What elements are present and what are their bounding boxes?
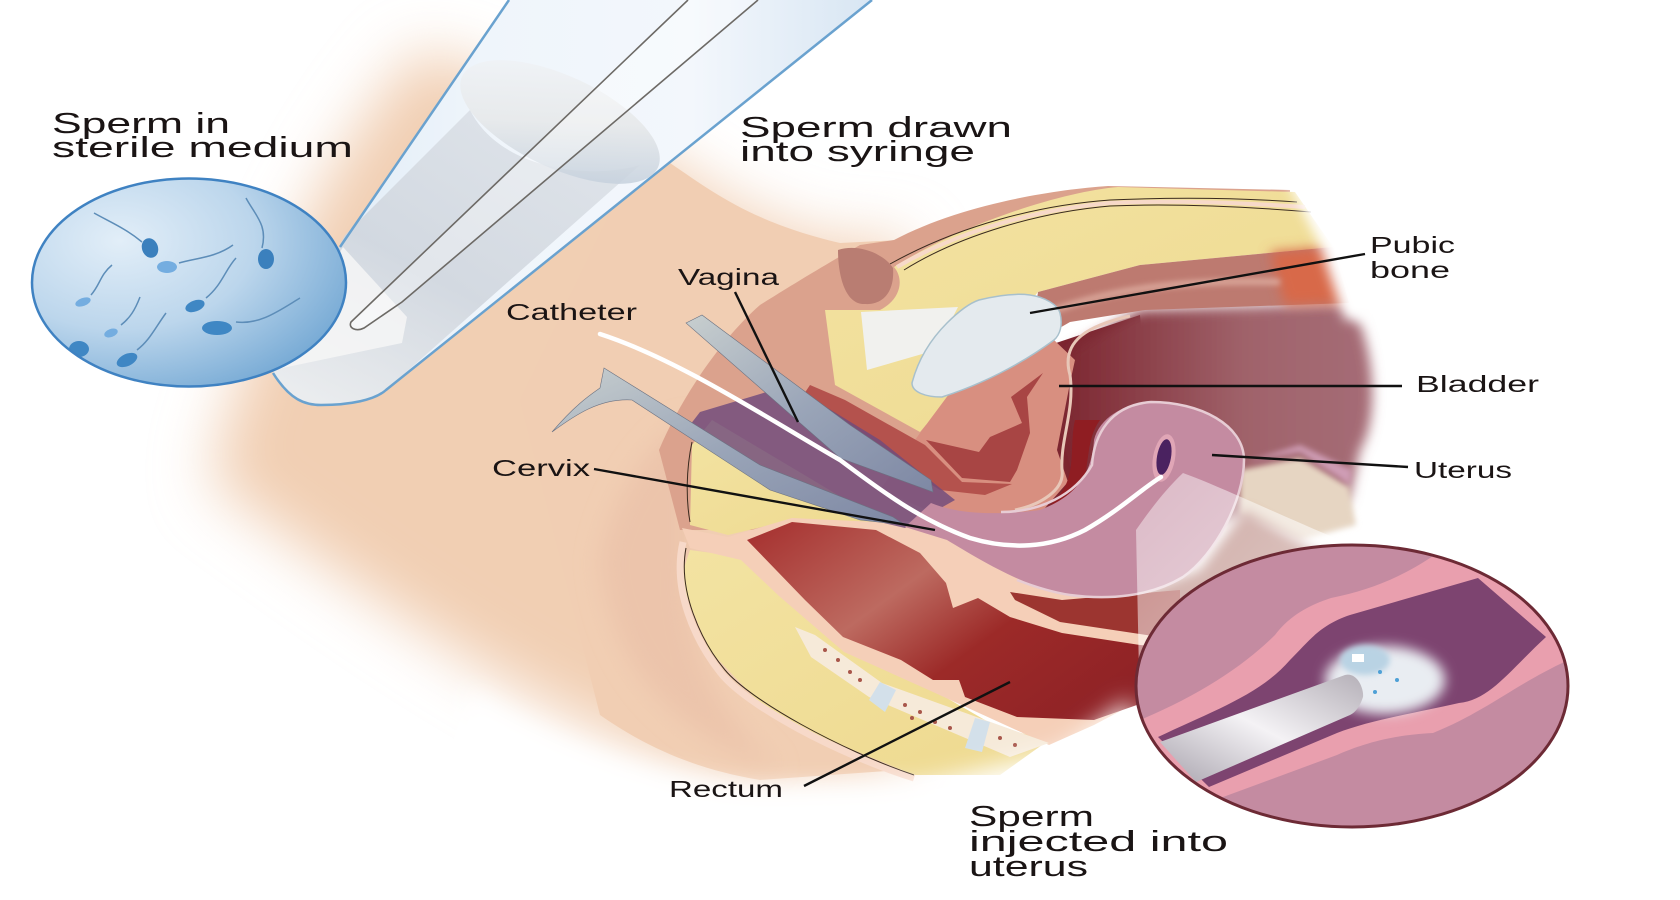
- droplet: [1325, 645, 1445, 714]
- label: bladder: Bladder: [1416, 371, 1540, 397]
- heading: sperm injected into uterus: injected into: [969, 826, 1228, 858]
- lumen: [1158, 578, 1546, 787]
- label: catheter: Catheter: [506, 299, 638, 325]
- fade at right of abdominal wall: [1285, 175, 1375, 320]
- panel: uterus: [905, 402, 1244, 597]
- heading: sperm in sterile medium: sterile medium: [52, 132, 353, 164]
- panel: abdominal cavity: [1040, 303, 1372, 540]
- label: pubic bone: bone: [1370, 257, 1450, 283]
- panel: rectum: [747, 522, 1200, 720]
- ovary: [1240, 445, 1356, 540]
- heading: sperm injected into uterus: uterus: [969, 851, 1088, 883]
- panel: red tissue band: [800, 385, 1012, 495]
- heading: sperm in sterile medium: Sperm in: [52, 108, 230, 140]
- panel: soft fade at lower edge: [400, 690, 1180, 900]
- panel: bladder: [880, 316, 1130, 525]
- label: rectum: Rectum: [669, 776, 783, 802]
- panel: magnified uterus view: [1136, 545, 1580, 827]
- panel: sperm close-up: [32, 178, 346, 386]
- panel: abdominal muscle: [1030, 247, 1349, 345]
- label: vagina: Vagina: [678, 264, 779, 290]
- heading: sperm drawn into syringe: into syringe: [740, 136, 975, 168]
- brown shading beneath the uterus: [1125, 510, 1330, 660]
- panel: lower fat and outer rim: [680, 542, 1049, 778]
- callout beam to magnified view: [1136, 473, 1390, 720]
- panel: body silhouette: [210, 50, 960, 780]
- panel: vaginal canal: [690, 385, 955, 528]
- panel: perineal fat: [687, 420, 905, 535]
- heading: sperm injected into uterus: [969, 801, 1228, 883]
- catheter close-up: [1160, 675, 1363, 782]
- panel: coccyx bone: [795, 627, 1049, 757]
- icon: speculum upper blade: [686, 315, 933, 492]
- pink lining: [1140, 556, 1580, 800]
- magnification wedge: [273, 247, 407, 370]
- panel: outer pink tissue: [659, 186, 1290, 530]
- icon: catheter: [600, 334, 1161, 546]
- needle: [350, 0, 758, 330]
- panel: pubic fat: [825, 187, 1333, 432]
- heading: sperm drawn into syringe: [740, 112, 1012, 168]
- icon: speculum lower blade: [552, 368, 905, 525]
- meniscus: [443, 35, 677, 209]
- icon: pubic bone: [861, 294, 1061, 397]
- label: pubic bone: [1370, 232, 1455, 283]
- heading: sperm in sterile medium: [52, 108, 353, 164]
- panel: peach rectal wall: [682, 518, 1190, 745]
- panel: syringe: [273, 0, 872, 405]
- heading: sperm injected into uterus: Sperm: [969, 801, 1094, 833]
- label: cervix: Cervix: [492, 455, 591, 481]
- heading: sperm drawn into syringe: Sperm drawn: [740, 112, 1012, 144]
- leader lines: [594, 254, 1408, 786]
- label: uterus: Uterus: [1414, 457, 1512, 483]
- label: pubic bone: Pubic: [1370, 232, 1455, 258]
